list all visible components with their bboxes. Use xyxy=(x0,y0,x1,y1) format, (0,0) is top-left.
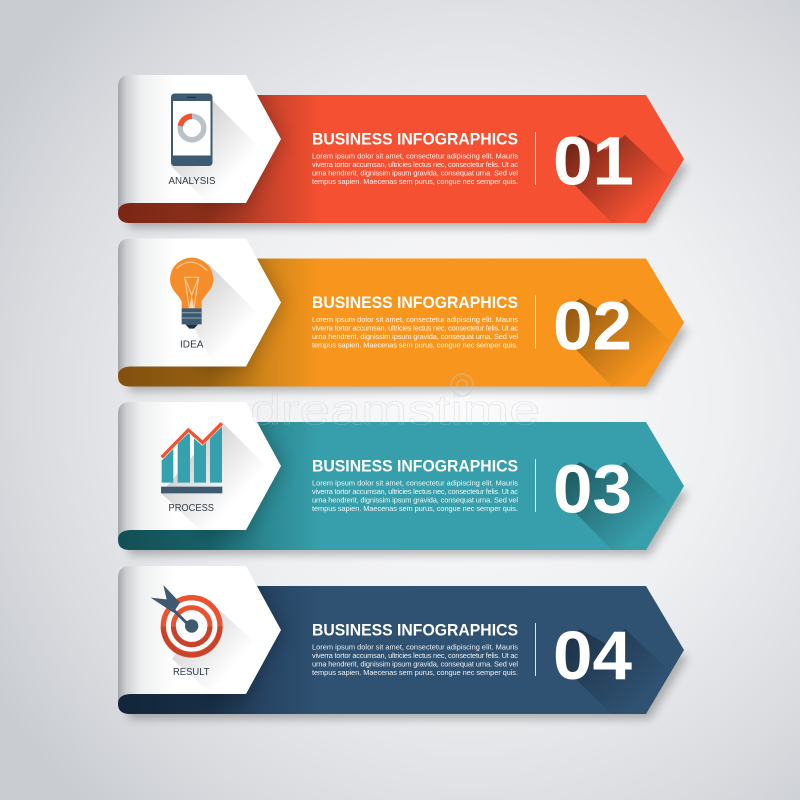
icon: light bulb xyxy=(170,258,213,329)
arrow band xyxy=(118,422,684,550)
icon: smartphone xyxy=(171,94,212,166)
panel: 03 process xyxy=(118,402,688,555)
icon shadow xyxy=(162,422,257,526)
band shadow xyxy=(126,162,688,228)
icon: bar chart xyxy=(161,423,222,493)
white tab xyxy=(118,238,281,372)
body text xyxy=(312,478,518,513)
label: process: PROCESS xyxy=(168,502,214,514)
body text: viverra tortor accumsan, ultricies lectus nec, consectetur felis. Ut ac xyxy=(312,651,518,660)
body text: Lorem ipsum dolor sit amet, consectetur adipiscing elit. Mauris xyxy=(312,315,518,324)
body text: urna hendrerit, dignissim ipsum gravida, consequat urna. Sed vel xyxy=(312,496,518,504)
band shadow xyxy=(126,326,688,392)
arrow band xyxy=(118,586,684,714)
heading: BUSINESS INFOGRAPHICS xyxy=(312,620,518,640)
label: result: RESULT xyxy=(173,666,210,678)
body text: Lorem ipsum dolor sit amet, consectetur adipiscing elit. Mauris xyxy=(312,642,518,652)
panel: 02 idea xyxy=(118,238,688,392)
number 03: 03 xyxy=(553,450,632,528)
icon shadow xyxy=(172,607,246,684)
number shadow xyxy=(566,462,663,549)
body text xyxy=(312,315,518,350)
body text: tempus sapien. Maecenas sem purus, congue nec semper quis. xyxy=(312,177,518,186)
number 04: 04 xyxy=(553,617,632,694)
number shadow xyxy=(566,298,665,386)
band shadow xyxy=(126,653,688,719)
body text: urna hendrerit, dignissim ipsum gravida, consequat urna. Sed vel xyxy=(312,660,518,668)
body text: tempus sapien. Maecenas sem purus, congue nec semper quis. xyxy=(312,668,518,677)
icon shadow xyxy=(171,100,250,195)
number 02: 02 xyxy=(553,288,632,364)
label: idea: IDEA xyxy=(180,338,204,350)
panel: 04 result xyxy=(118,566,688,719)
arrow band xyxy=(118,95,684,223)
body text xyxy=(312,642,518,677)
watermark: dreamstime xyxy=(250,386,540,433)
heading: BUSINESS INFOGRAPHICS xyxy=(312,130,518,148)
heading: BUSINESS INFOGRAPHICS xyxy=(312,456,518,476)
watermark xyxy=(250,374,540,433)
body text: urna hendrerit, dignissim ipsum gravida, consequat urna. Sed vel xyxy=(312,168,518,178)
body text: Lorem ipsum dolor sit amet, consectetur adipiscing elit. Mauris xyxy=(312,478,518,488)
band shadow xyxy=(126,489,688,555)
panel: 01 analysis xyxy=(118,75,688,228)
body text: Lorem ipsum dolor sit amet, consectetur adipiscing elit. Mauris xyxy=(312,152,518,160)
body text: tempus sapien. Maecenas sem purus, congue nec semper quis. xyxy=(312,504,518,513)
number shadow xyxy=(566,629,656,708)
icon: target and dart xyxy=(151,585,223,658)
white tab xyxy=(118,402,281,536)
label: analysis: ANALYSIS xyxy=(168,175,216,187)
number 01: 01 xyxy=(553,122,632,200)
body text: viverra tortor accumsan, ultricies lectus nec, consectetur felis. Ut ac xyxy=(312,160,518,169)
icon shadow xyxy=(195,264,248,352)
white tab xyxy=(118,75,281,209)
arrow band xyxy=(118,258,684,386)
body text: tempus sapien. Maecenas sem purus, congue nec semper quis. xyxy=(312,340,518,350)
body text: urna hendrerit, dignissim ipsum gravida, consequat urna. Sed vel xyxy=(312,332,518,341)
body text: viverra tortor accumsan, ultricies lectus nec, consectetur felis. Ut ac xyxy=(312,487,518,496)
heading: BUSINESS INFOGRAPHICS xyxy=(312,293,518,312)
body text: viverra tortor accumsan, ultricies lectus nec, consectetur felis. Ut ac xyxy=(312,324,518,332)
number shadow xyxy=(566,135,666,223)
body text xyxy=(312,152,518,186)
white tab xyxy=(118,566,281,700)
